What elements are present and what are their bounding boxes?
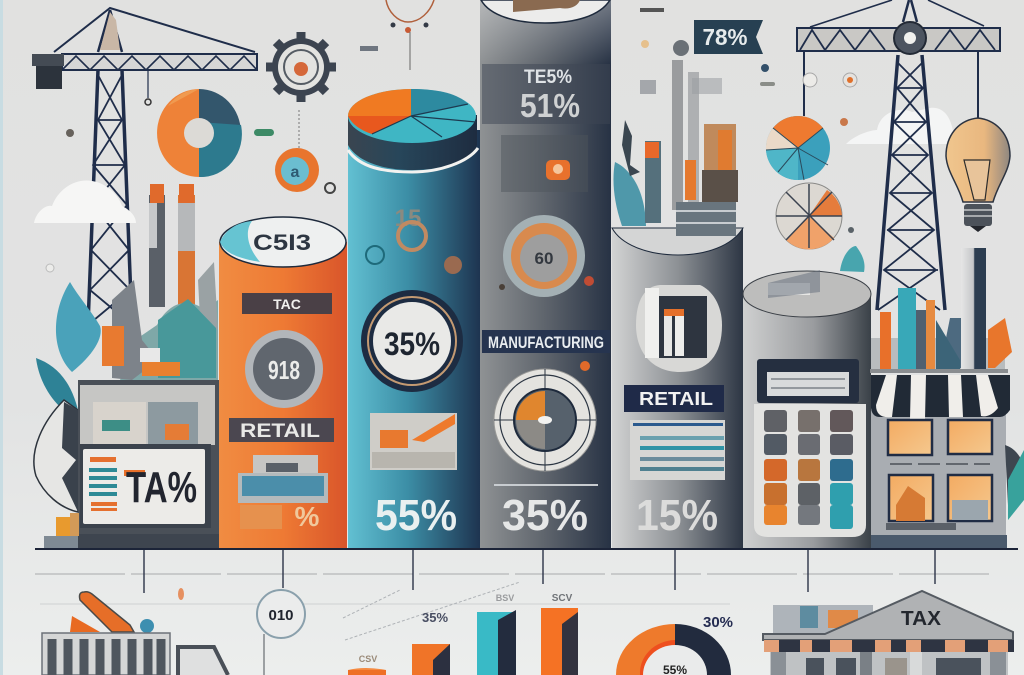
bars and chimney above shop — [871, 248, 1012, 370]
label: TAC: TAC — [273, 296, 301, 312]
panel: left building — [44, 380, 219, 549]
calculator — [754, 359, 866, 537]
value: 51%: 51% — [520, 87, 580, 124]
plant group — [613, 40, 738, 236]
crane: right — [797, 0, 1000, 310]
label: manufacturing: MANUFACTURING — [488, 333, 604, 352]
chart labels: CSV — [359, 654, 377, 664]
icons: 15 — [395, 205, 421, 232]
label: manufacturing — [482, 330, 610, 353]
value: 35%: 35% — [502, 491, 588, 540]
dial: 35% — [361, 290, 463, 392]
bank building — [763, 591, 1014, 675]
icon: machine — [636, 285, 722, 372]
pie chart: outline — [776, 183, 842, 249]
label: retail — [624, 385, 724, 412]
pie chart: top left — [157, 89, 242, 177]
value: 55%: 55% — [375, 491, 457, 540]
bank building: TAX — [901, 608, 942, 630]
small teal icon — [840, 246, 865, 272]
label: retail — [229, 418, 334, 442]
icons — [366, 205, 462, 274]
crane: left — [54, 8, 257, 325]
panel: orange column — [219, 217, 347, 549]
icon: printer: % — [295, 501, 320, 532]
text: TA% screen — [83, 449, 205, 524]
icon: 010 badge: 010 — [268, 607, 294, 624]
small icons: scattered — [46, 8, 857, 272]
banner: 78%: 78% — [702, 24, 748, 50]
text: TA% screen: TA% — [126, 463, 197, 512]
leaves and rocks: left — [34, 262, 218, 512]
icon: 010 badge — [178, 588, 305, 638]
top dial fragment — [386, 0, 434, 70]
chart labels: BSV — [496, 593, 514, 603]
panel: teal column — [348, 89, 480, 549]
chart labels: 35% — [422, 610, 448, 625]
dial: 918 — [245, 330, 323, 408]
panel: dark column — [480, 0, 611, 549]
label: retail: RETAIL — [639, 389, 713, 409]
axis and grid lines — [35, 550, 990, 675]
crane counterweight — [32, 54, 151, 105]
chart labels: SCV — [552, 593, 573, 604]
baseline — [35, 548, 1018, 550]
smokestacks — [149, 184, 195, 307]
icon: orange circle: a — [291, 164, 300, 181]
cloud: left — [34, 181, 136, 223]
bar chart — [348, 593, 578, 675]
text: cap label: C5I3 — [253, 230, 311, 255]
light bulb — [946, 118, 1010, 232]
dotted panel — [501, 135, 588, 192]
pie chart: teal — [766, 52, 830, 180]
pie cap — [348, 89, 478, 172]
cap — [220, 217, 346, 267]
awning — [871, 375, 1010, 419]
gear icon — [266, 32, 336, 150]
text: 30%: 30% — [703, 614, 733, 631]
chart card — [630, 420, 725, 480]
donut chart — [616, 624, 731, 675]
chart labels — [359, 593, 573, 664]
dial: 35%: 35% — [384, 326, 440, 362]
label: TAC — [242, 293, 332, 314]
cap — [612, 228, 743, 255]
dial: 918: 918 — [268, 355, 300, 385]
crane hub — [894, 22, 926, 54]
banner: 78% — [694, 20, 763, 54]
icon: orange circle — [254, 129, 319, 192]
label: retail: RETAIL — [240, 421, 320, 442]
card — [370, 413, 457, 470]
icon: printer — [238, 455, 328, 532]
cloud: right — [846, 108, 954, 144]
text: label: TE5% — [524, 67, 572, 88]
value: 15%: 15% — [636, 491, 718, 540]
gauge — [499, 215, 594, 297]
cap — [481, 0, 610, 23]
cargo — [70, 592, 154, 633]
dial chart — [494, 361, 596, 471]
truck — [42, 592, 228, 675]
gauge: 60 — [535, 249, 553, 268]
panel: retail column — [612, 40, 743, 549]
shop building — [870, 369, 1024, 549]
windows — [888, 420, 992, 521]
panel: column with calculator — [743, 270, 871, 549]
